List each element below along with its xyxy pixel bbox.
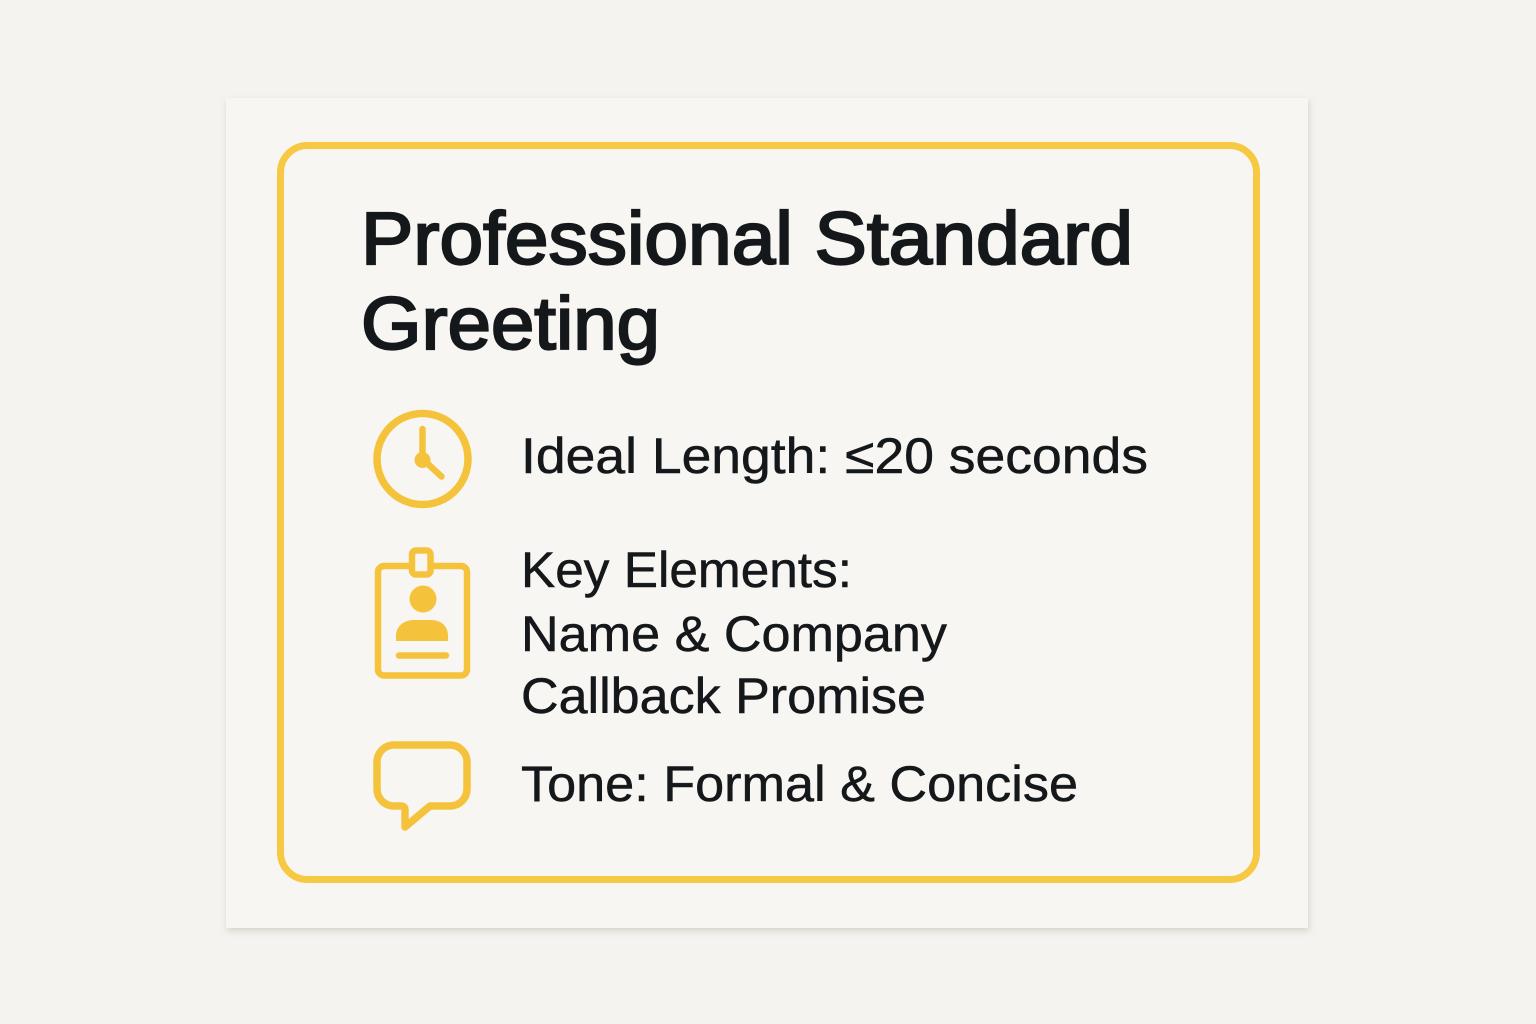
icon: speech bubble [377,745,467,827]
text: key elements: Key Elements: [521,542,852,598]
title [361,197,1133,365]
yellow rounded frame [280,146,1256,880]
title: Greeting [361,282,660,365]
panel: greeting card [226,98,1308,928]
text: ideal length: Ideal Length: ≤20 seconds [521,428,1148,484]
icon: id badge [378,550,467,676]
text: tone: Tone: Formal & Concise [521,756,1078,812]
text: key elements [521,542,947,724]
text: key elements: Name & Company [521,606,947,662]
title: Professional Standard [361,197,1133,280]
icon: clock [377,414,468,504]
text: key elements: Callback Promise [521,668,926,724]
